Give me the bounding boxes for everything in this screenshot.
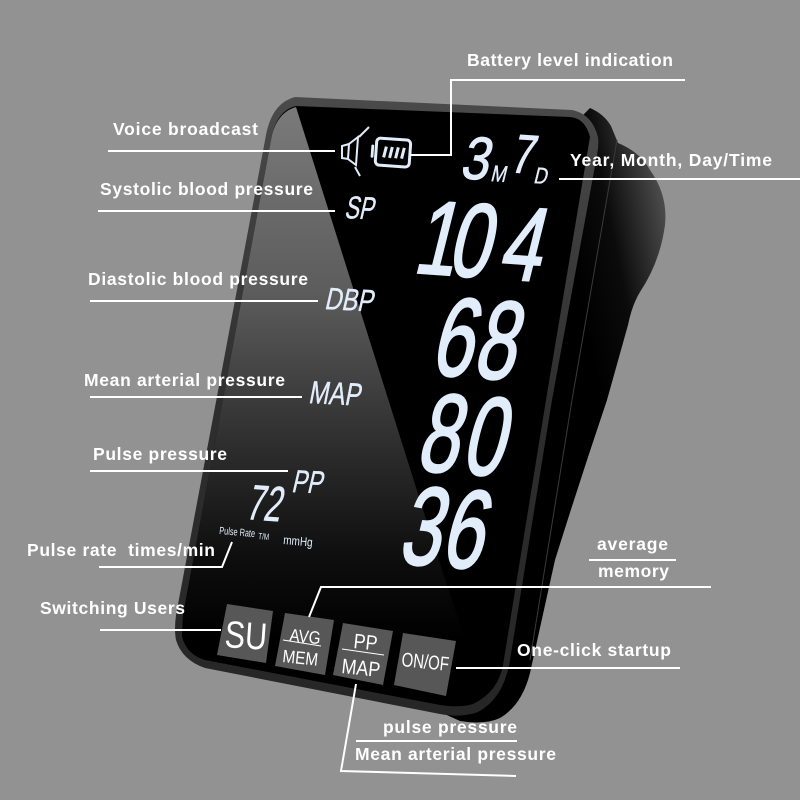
pulse reading: 72 [242,474,290,532]
callout: systolic: Systolic blood pressure [100,179,313,199]
button: SU: SU [223,614,268,659]
date readout: M [489,162,510,187]
button: AVG MEM: MEM [282,646,319,670]
callout: pulse rate [27,540,232,567]
device: blood pressure monitor [175,97,665,722]
callout: battery level: Battery level indication [467,50,673,70]
callout: pulse rate: Pulse rate times/min [27,540,215,560]
button: PP MAP [333,623,393,685]
mmHg caption: mmHg [283,534,313,550]
callout: average memory: memory [598,561,669,581]
callout: switching users: Switching Users [40,598,185,618]
button: SU [217,604,273,663]
date readout [456,124,551,193]
callout: mean arterial: Mean arterial pressure [84,370,285,390]
button: AVG MEM [275,613,334,675]
button: PP MAP: MAP [340,655,381,682]
callout: pulse and mean pressure [341,684,556,776]
date readout: 7 [506,124,543,186]
glass reflection [182,107,482,690]
pulse rate caption: Pulse Rate [219,525,256,539]
tag: PP: PP [289,464,328,500]
button: PP MAP: PP [352,630,379,656]
callout: voice broadcast: Voice broadcast [113,119,258,139]
date readout: D [532,164,551,189]
callout: pulse pressure: Pulse pressure [93,444,227,464]
callout: diastolic: Diastolic blood pressure [88,269,308,289]
pulse pressure reading: 36 [391,464,505,593]
callout: pulse and mean pressure: Mean arterial pressure [355,744,556,764]
button: AVG MEM: AVG [289,625,322,649]
button: ON/OF [394,633,456,696]
button: ON/OF: ON/OF [401,648,450,675]
diastolic reading: 68 [423,275,538,404]
callout: pulse and mean pressure: pulse pressure [383,717,517,737]
mean arterial reading: 80 [409,371,526,500]
tag: SP: SP [342,189,380,226]
tag: DBP: DBP [322,281,379,318]
callout: average memory: average [597,534,668,554]
callout: battery level [410,50,685,155]
T/M caption: T/M [258,531,269,542]
cuff seam line [530,140,617,660]
date readout: 3 [456,124,501,193]
device cuff body [400,108,665,722]
tag: MAP: MAP [306,375,365,414]
icon: speaker [342,127,369,176]
systolic reading: 104 [407,180,561,304]
device bezel [175,97,598,716]
callout: one-click startup: One-click startup [517,640,671,660]
device screen [182,106,590,706]
callout: average memory [309,534,711,617]
icon: battery [370,138,411,167]
callout: date and time: Year, Month, Day/Time [570,150,772,170]
